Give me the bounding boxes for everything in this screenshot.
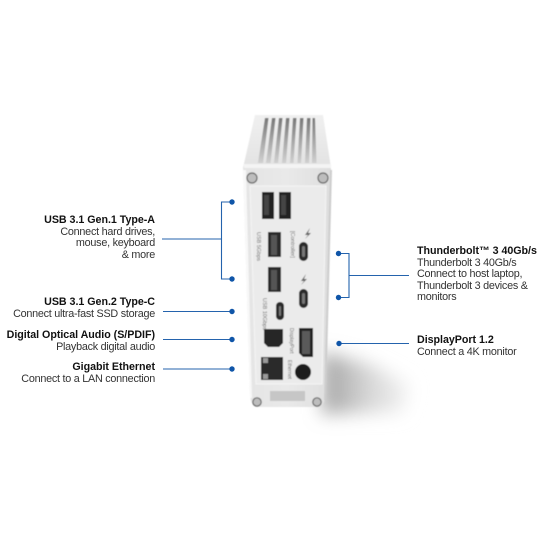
- connector: DisplayPort: [336, 341, 409, 346]
- screws: [247, 173, 328, 406]
- label: USB 3.1 Gen.1 Type-A: & more: [122, 249, 155, 261]
- connector: optical audio: [163, 337, 235, 342]
- label: USB 3.1 Gen.1 Type-A: Connect hard drives,: [60, 226, 155, 238]
- label: DisplayPort 1.2: DisplayPort 1.2: [417, 334, 494, 346]
- Ethernet port: [261, 357, 283, 380]
- port labels: Ethernet: [286, 360, 292, 380]
- label: Gigabit Ethernet: [21, 361, 155, 385]
- port labels: USB 10Gbps: [261, 298, 267, 330]
- label: Digital Optical Audio: [7, 329, 155, 353]
- connector: Ethernet: [163, 366, 235, 372]
- connector: USB Type-C: [163, 309, 235, 314]
- label: Gigabit Ethernet: Gigabit Ethernet: [72, 361, 155, 373]
- port labels: USB 5Gbps: [255, 232, 261, 261]
- device: [243, 115, 332, 407]
- bottom grip: [270, 391, 305, 401]
- drop shadow: [322, 352, 410, 414]
- label: DisplayPort 1.2: Connect a 4K monitor: [417, 346, 516, 358]
- USB 3.1 Gen.1 Type-A ports: [262, 192, 291, 292]
- label: Thunderbolt 3: Connect to host laptop,: [417, 268, 522, 280]
- label: USB 3.1 Gen.2 Type-C: USB 3.1 Gen.2 Type-C: [44, 296, 155, 308]
- label: DisplayPort 1.2: [417, 334, 517, 358]
- label: Digital Optical Audio: Digital Optical Audio (S/PDIF): [7, 329, 155, 341]
- DisplayPort port: [299, 328, 313, 357]
- label: USB 3.1 Gen.2 Type-C: Connect ultra-fast SSD storage: [13, 308, 155, 320]
- label: Thunderbolt 3: Thunderbolt™ 3 40Gb/s: [417, 245, 537, 257]
- label: Digital Optical Audio: Playback digital audio: [56, 341, 155, 353]
- port labels: DisplayPort: [288, 328, 294, 354]
- label: USB 3.1 Gen.1 Type-A: [44, 214, 155, 261]
- label: USB 3.1 Gen.1 Type-A: USB 3.1 Gen.1 Type-A: [44, 214, 155, 226]
- USB 3.1 Gen.2 Type-C port: [276, 302, 284, 320]
- label: USB 3.1 Gen.2 Type-C: [13, 296, 155, 320]
- label: Thunderbolt 3: Thunderbolt 3 devices &: [417, 280, 528, 292]
- connector: USB Type-A bracket: [162, 199, 235, 282]
- optical audio port: [264, 329, 283, 347]
- label: Thunderbolt 3: Thunderbolt 3 40Gb/s: [417, 257, 516, 269]
- front panel: [243, 168, 332, 407]
- port labels: [Controller]: [289, 231, 295, 258]
- Thunderbolt 3 ports: [299, 228, 311, 308]
- label: Thunderbolt 3: [417, 245, 537, 303]
- top heat sink: [243, 115, 331, 170]
- label: USB 3.1 Gen.1 Type-A: mouse, keyboard: [76, 237, 155, 249]
- label: Gigabit Ethernet: Connect to a LAN connection: [21, 373, 155, 385]
- label: Thunderbolt 3: monitors: [417, 291, 456, 303]
- connector: Thunderbolt bracket: [336, 251, 409, 300]
- port labels: [255, 231, 295, 380]
- power jack: [295, 364, 311, 380]
